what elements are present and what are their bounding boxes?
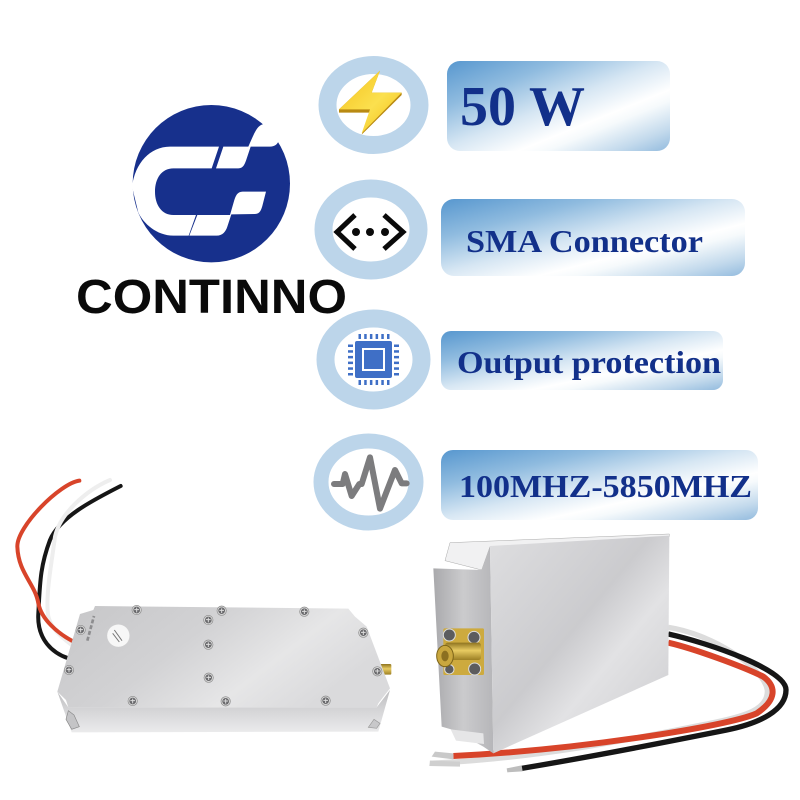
wires: black, white, red xyxy=(17,480,121,658)
side face xyxy=(433,547,493,753)
icon: chip in ring xyxy=(326,318,422,400)
SMA connector stub xyxy=(380,664,391,675)
logo: CONTINNO xyxy=(76,105,347,324)
mounting ears xyxy=(66,711,79,729)
icon: signal pulse in ring xyxy=(321,441,416,523)
main face xyxy=(490,536,669,753)
product photo: module standing on edge with SMA connector and wires xyxy=(429,534,786,772)
stripped wire ends xyxy=(432,752,453,759)
product photo: flat amplifier module with wires xyxy=(17,480,391,732)
logo wordmark: CONTINNO xyxy=(76,271,347,324)
sticker xyxy=(107,624,130,647)
icon: lightning bolt in ring xyxy=(328,65,420,145)
panel text: 100MHZ-5850MHZ: 100MHZ-5850MHZ xyxy=(459,468,752,504)
top flange xyxy=(445,534,669,570)
module front face xyxy=(57,690,390,732)
module top face xyxy=(57,606,390,707)
SMA connector xyxy=(437,628,484,675)
panel: 100MHZ-5850MHZ xyxy=(441,450,758,520)
panel: Output protection xyxy=(441,331,723,390)
engraved marks xyxy=(87,616,94,641)
panel text: SMA Connector: SMA Connector xyxy=(466,223,703,259)
panel: 50 W xyxy=(447,61,670,151)
panel text: 50 W: 50 W xyxy=(460,76,585,138)
panel text: Output protection: Output protection xyxy=(457,344,721,380)
icon: connector dots in ring xyxy=(324,188,418,270)
panel: SMA Connector xyxy=(441,199,745,276)
bottom notch xyxy=(451,729,484,744)
wires: white, black, red xyxy=(430,627,786,768)
screws xyxy=(64,605,382,706)
logo mark: blue circle with white C xyxy=(132,105,293,262)
